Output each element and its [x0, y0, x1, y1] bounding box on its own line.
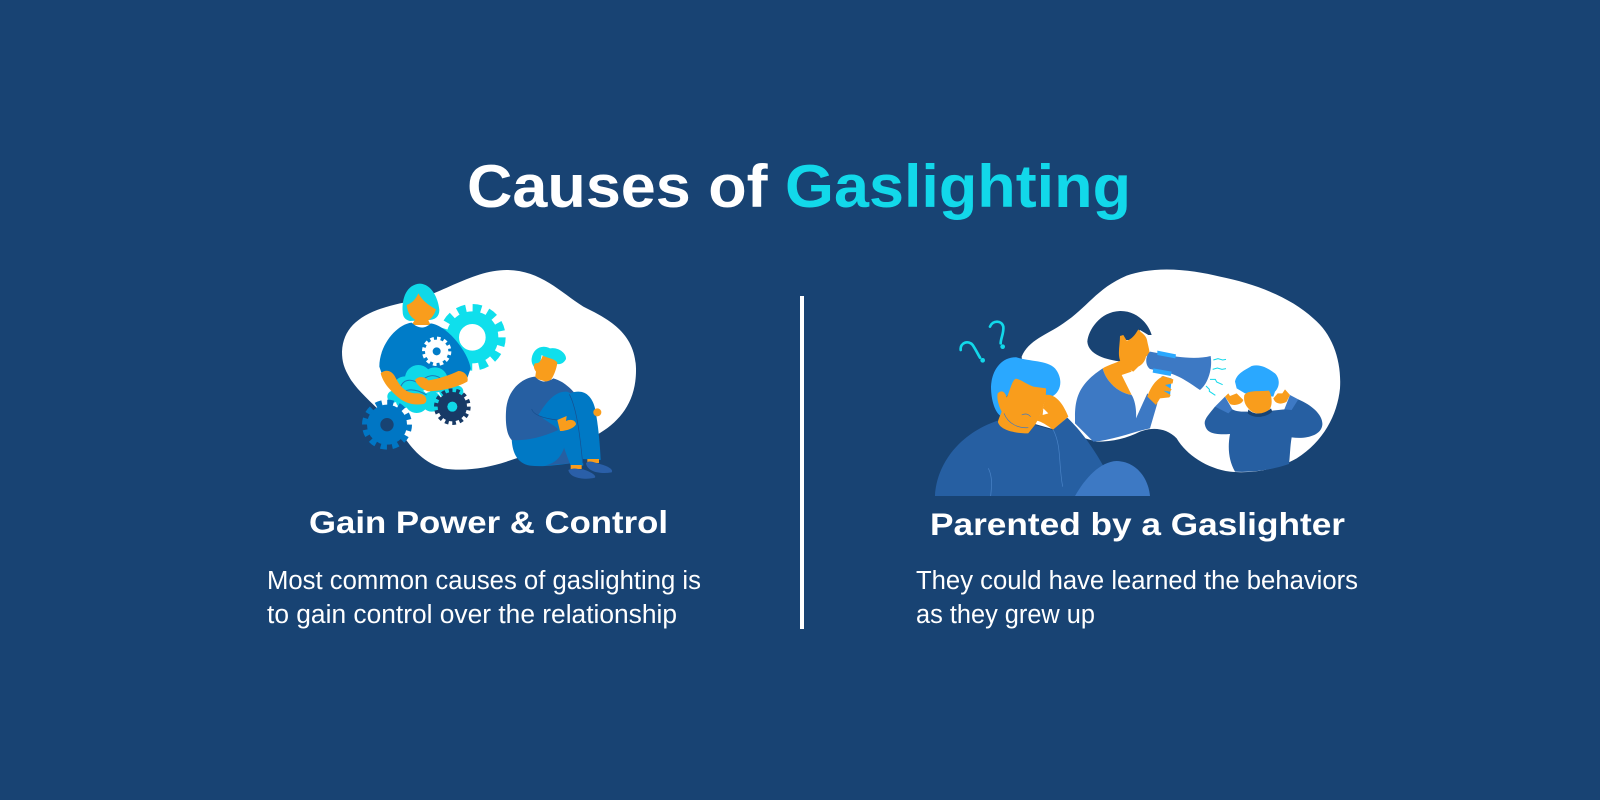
text block: parented description — [916, 567, 1358, 629]
figure: child covering ears — [1205, 365, 1322, 472]
title: Causes of Gaslighting — [467, 153, 1131, 220]
figure: parent with megaphone — [1075, 311, 1226, 442]
blob: right background — [1022, 269, 1340, 472]
text block: gain power description: Most common causes of gaslighting is — [267, 567, 701, 595]
text block: parented description: They could have learned the behaviors — [916, 567, 1358, 595]
panel: parented by a gaslighter — [916, 269, 1358, 629]
figure: seated man — [506, 347, 612, 479]
text block: parented description: as they grew up — [916, 601, 1095, 629]
figure: woman with gears — [365, 284, 502, 447]
text block: gain power description — [267, 567, 701, 629]
heading: parented by a gaslighter: Parented by a Gaslighter — [930, 506, 1345, 542]
illustration: parent with megaphone shouting at child — [935, 269, 1340, 496]
text block: gain power description: to gain control over the relationship — [267, 601, 677, 629]
knee — [1075, 461, 1150, 496]
panel: gain power and control — [267, 270, 701, 629]
figure: confused man — [935, 357, 1108, 496]
heading: gain power and control: Gain Power & Control — [309, 504, 668, 540]
blob: left background — [342, 270, 636, 470]
icon: question marks — [961, 322, 1005, 363]
divider — [800, 296, 804, 629]
illustration: woman with gears and seated man — [342, 270, 636, 479]
